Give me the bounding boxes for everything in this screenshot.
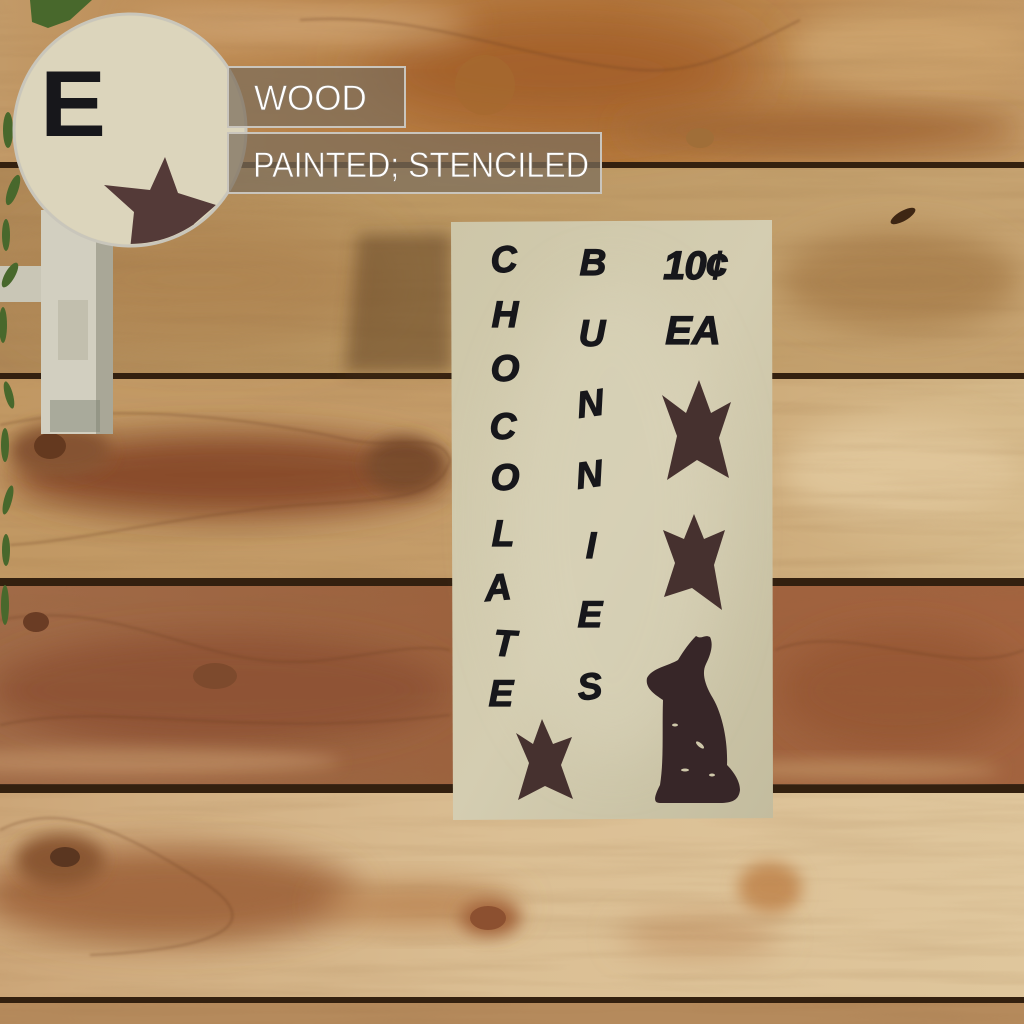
- sign text: BUNNIES: B: [580, 242, 606, 283]
- icon: small star: [516, 719, 573, 800]
- sign text: CHOCOLATE: H: [492, 294, 520, 335]
- wooden sign board: [451, 220, 773, 820]
- bunny paint flecks: [672, 724, 715, 776]
- sign text: 10 cents each: EA: [665, 309, 721, 353]
- label: wood: WOOD: [254, 79, 367, 118]
- sign text: CHOCOLATE: C: [489, 238, 520, 281]
- sign text: CHOCOLATE: A: [482, 566, 513, 609]
- sign text: BUNNIES: U: [579, 313, 607, 354]
- label: painted; stenciled: PAINTED; STENCILED: [253, 146, 589, 185]
- sign text: 10 cents each: 10¢: [663, 244, 728, 288]
- sign text: CHOCOLATE: C: [490, 406, 518, 447]
- sign text: CHOCOLATE: E: [489, 673, 515, 714]
- icon: medium star: [663, 514, 725, 610]
- sign text: BUNNIES: N: [574, 381, 608, 426]
- sign text: CHOCOLATE: O: [491, 457, 520, 498]
- sign text: 10 cents each: [663, 244, 728, 353]
- sign shadow: [345, 232, 452, 372]
- sign text: CHOCOLATE: [482, 238, 520, 714]
- label: wood: [228, 67, 405, 127]
- icon: large star: [662, 380, 731, 480]
- sign text: BUNNIES: E: [578, 594, 604, 635]
- icon: bunny silhouette: [647, 636, 740, 803]
- sign text: BUNNIES: S: [575, 665, 604, 708]
- hanging plant leaves: [0, 0, 92, 625]
- zoom star: [104, 157, 216, 250]
- sign text: BUNNIES: N: [573, 452, 607, 497]
- sign text: CHOCOLATE: L: [492, 513, 514, 554]
- white painted bracket post: [0, 210, 113, 434]
- sign text: CHOCOLATE: T: [492, 622, 520, 665]
- label: painted; stenciled: [228, 133, 601, 193]
- zoom letter E: E: [40, 51, 106, 156]
- callout labels: [228, 67, 601, 193]
- wood knots: [23, 55, 918, 930]
- sign text: CHOCOLATE: O: [491, 348, 520, 389]
- zoom detail circle: [14, 14, 246, 250]
- sign text: BUNNIES: [573, 242, 608, 708]
- sign text: BUNNIES: I: [586, 525, 597, 566]
